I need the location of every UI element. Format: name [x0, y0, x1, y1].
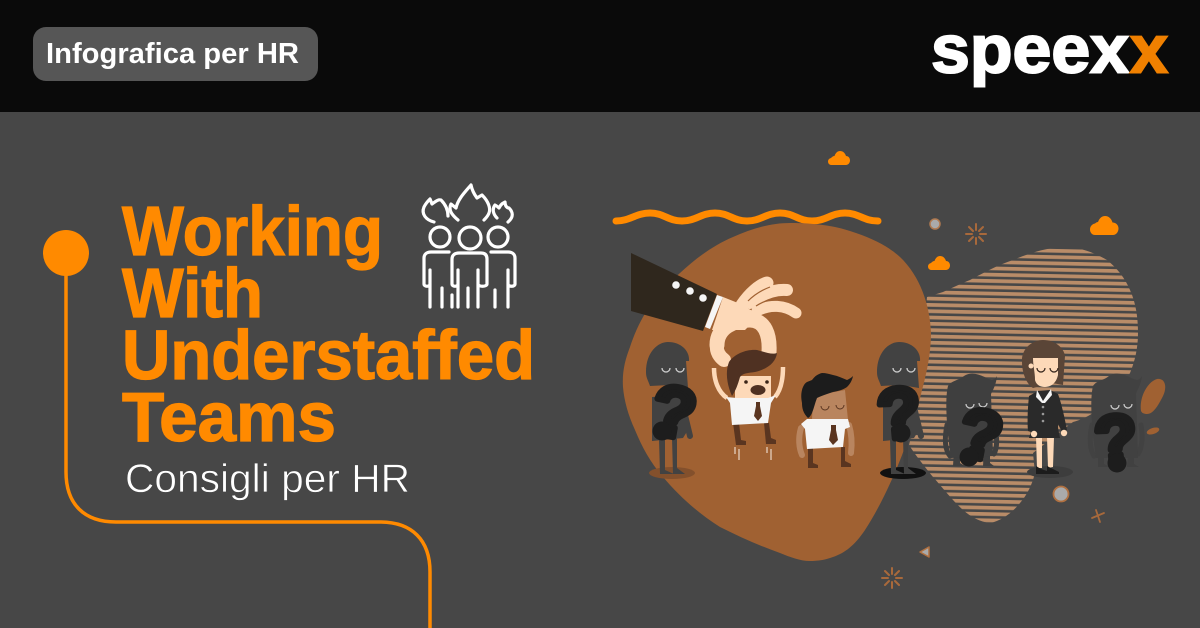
title: [122, 192, 535, 456]
brown blob background: [623, 223, 931, 561]
jump motion lines: [735, 447, 771, 460]
illustration: silhouette man right: [1090, 374, 1142, 481]
decorative dot large: [1054, 486, 1068, 502]
logo: speexx: speex: [931, 12, 1129, 88]
cloud top: [828, 151, 850, 165]
logo: speexx: x: [1130, 12, 1168, 88]
icon: team on fire: [423, 185, 515, 307]
title: Understaffed: [122, 316, 535, 394]
subtitle: Consigli per HR: [125, 457, 410, 501]
header bar: [0, 0, 1200, 112]
illustration: woman in suit: [1022, 340, 1073, 478]
striped blob background: [909, 247, 1138, 523]
necktie: [829, 425, 838, 445]
eyes closed: [966, 403, 987, 408]
badge: Infografica per HR: [33, 27, 318, 81]
title: Working: [122, 192, 383, 270]
eyes closed: [893, 368, 915, 372]
illustration: man with black hair: [799, 373, 853, 468]
eyes closed: [662, 368, 684, 372]
decorative dot small: [930, 219, 940, 229]
brown accent blob large: [1141, 379, 1165, 414]
cloud right: [1090, 216, 1118, 235]
wave line: [616, 213, 878, 221]
eyes closed: [1111, 404, 1132, 409]
brown accent blob small: [1146, 426, 1160, 436]
question mark: ?: [1091, 399, 1141, 481]
necktie: [754, 402, 762, 421]
illustration: silhouette woman right: [874, 342, 926, 479]
starburst lower: [882, 568, 902, 588]
starburst upper: [966, 224, 986, 244]
illustration: hand and sleeve: [631, 253, 796, 360]
orange timeline connector: [43, 230, 430, 628]
title: Teams: [122, 378, 336, 456]
illustration: silhouette woman left: [645, 342, 702, 479]
question mark: ?: [645, 370, 702, 456]
badge: Infografica per HR: Infografica per HR: [46, 38, 299, 70]
question mark: ?: [953, 393, 1009, 477]
cross mark: [1092, 510, 1104, 522]
cloud left: [928, 256, 950, 270]
illustration: man lifted by hand: [714, 350, 783, 460]
triangle marker: [920, 547, 929, 557]
question mark: ?: [874, 372, 925, 456]
title: With: [122, 254, 263, 332]
illustration: silhouette man on stripes: [945, 374, 1009, 477]
